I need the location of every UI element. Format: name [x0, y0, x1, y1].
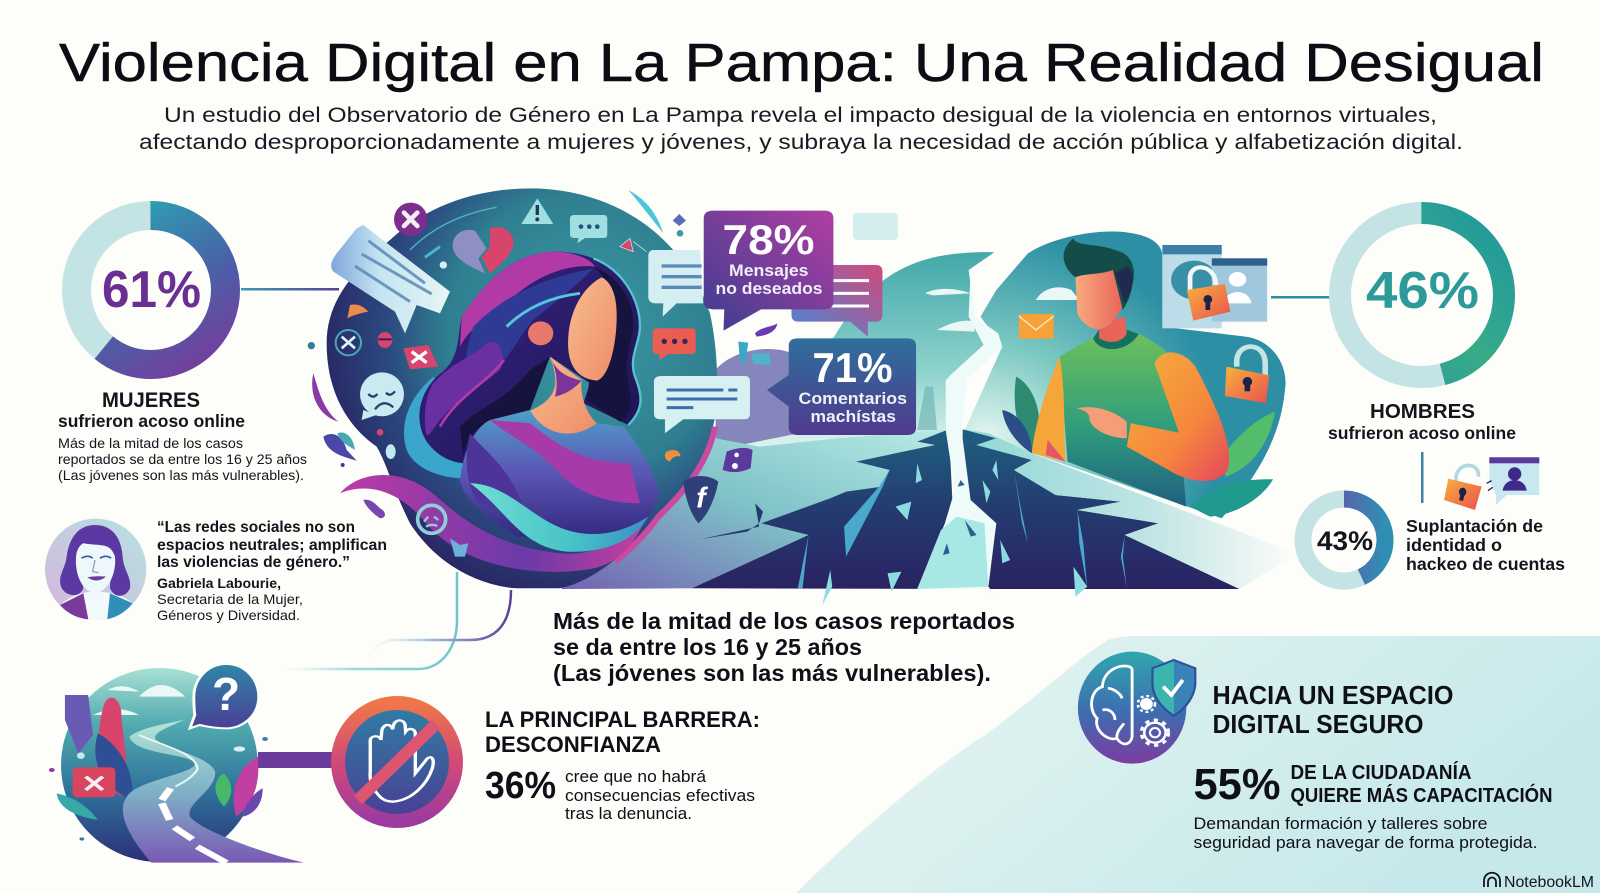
callout: 78% mensajes no deseados: Mensajes — [729, 261, 808, 280]
icon: envelope — [1019, 314, 1054, 339]
panel: hacia un espacio digital seguro background — [796, 636, 1600, 893]
connector line: mujeres — [241, 288, 339, 290]
text block: jovenes vulnerables: Más de la mitad de los casos reportados — [553, 608, 1015, 634]
text block: jovenes vulnerables — [553, 608, 1015, 686]
text block: la principal barrera: LA PRINCIPAL BARRERA: — [485, 707, 760, 732]
text block: la principal barrera: DESCONFIANZA — [485, 732, 661, 757]
callout: 71% comentarios machistas: 71% — [812, 344, 892, 391]
icon: winding road with question — [49, 668, 304, 863]
speech bubble: pink chat with lines — [792, 265, 882, 337]
text block: hombres: HOMBRES — [1370, 401, 1475, 423]
text block: hombres — [1328, 401, 1516, 443]
text block: suplantacion — [1406, 516, 1565, 574]
text block: mujeres: Más de la mitad de los casos — [58, 436, 243, 451]
callout: 78% mensajes no deseados — [704, 211, 833, 331]
icon: open padlock and profile — [1444, 457, 1539, 510]
text block: hacia un espacio digital seguro — [1194, 680, 1552, 852]
text block: mujeres: MUJERES — [102, 389, 200, 412]
text block: hacia un espacio digital seguro: DIGITAL SEGURO — [1212, 709, 1424, 739]
quote: Secretaria de la Mujer, — [157, 591, 303, 607]
text block: hacia un espacio digital seguro: 55% — [1194, 760, 1280, 809]
fractured ground and cliffs — [561, 270, 1297, 605]
donut chart: 46% hombres — [1340, 213, 1504, 377]
icon: profile card with padlock — [1162, 245, 1267, 328]
logo: NotebookLM: NotebookLM — [1504, 874, 1594, 891]
woman illustration in circle — [327, 188, 717, 588]
donut chart: 61% mujeres — [76, 216, 226, 364]
callout: 71% comentarios machistas: Comentarios — [798, 389, 907, 408]
icons around woman — [308, 190, 777, 557]
title: Violencia Digital en La Pampa: Una Realidad Desigual — [59, 33, 1544, 93]
quote: Géneros y Diversidad. — [157, 607, 300, 623]
donut chart: 46% hombres: 46% — [1366, 262, 1479, 320]
icon: brain shield and gears — [1078, 652, 1195, 764]
icon: question bubble — [190, 664, 259, 728]
subtitle: Un estudio del Observatorio de Género en La Pampa revela el impacto desigual de la violencia en entornos virtuales, — [164, 103, 1437, 127]
donut chart: 61% mujeres: 61% — [102, 261, 201, 319]
subtitle: afectando desproporcionadamente a mujeres y jóvenes, y subraya la necesidad de acción pública y alfabetización digital. — [139, 130, 1463, 154]
text block: mujeres: reportados se da entre los 16 y 25 años — [58, 452, 307, 467]
quote: espacios neutrales; amplifican — [157, 537, 387, 554]
icon: portrait of Gabriela Labourie — [45, 519, 146, 620]
text block: la principal barrera: consecuencias efectivas — [565, 787, 755, 805]
callout: 71% comentarios machistas: machístas — [810, 407, 896, 426]
text block: la principal barrera — [485, 707, 760, 823]
connector bar — [258, 752, 334, 768]
icons around woman: f — [696, 482, 708, 514]
donut chart: 43% suplantacion: 43% — [1317, 526, 1373, 556]
text block: la principal barrera: tras la denuncia. — [565, 805, 692, 823]
quote — [157, 519, 387, 623]
quote: Gabriela Labourie, — [157, 575, 281, 591]
callout: 78% mensajes no deseados: 78% — [722, 216, 814, 263]
divider line — [1421, 452, 1424, 503]
icon: no hand sign — [338, 703, 456, 821]
callout: 71% comentarios machistas — [767, 338, 916, 435]
connector lines: curved from woman to barrier — [282, 572, 511, 669]
connector line: hombres — [1271, 296, 1331, 298]
text block: suplantacion: hackeo de cuentas — [1406, 554, 1565, 574]
donut chart: 43% suplantacion — [1303, 499, 1385, 581]
quote: las violencias de género.” — [157, 554, 350, 571]
icon: padlock — [1225, 347, 1269, 403]
text block: la principal barrera: cree que no habrá — [565, 768, 707, 786]
text block: hombres: sufrieron acoso online — [1328, 423, 1516, 443]
text block: hacia un espacio digital seguro: QUIERE MÁS CAPACITACIÓN — [1290, 783, 1552, 807]
central illustration: fractured landscape with man — [716, 231, 1286, 518]
text block: hacia un espacio digital seguro: Demandan formación y talleres sobre — [1194, 814, 1488, 833]
text block: mujeres: sufrieron acoso online — [58, 411, 245, 431]
text block: mujeres: (Las jóvenes son las más vulnerables). — [58, 468, 304, 483]
callout: 78% mensajes no deseados: no deseados — [716, 279, 822, 298]
text block: hacia un espacio digital seguro: DE LA CIUDADANÍA — [1290, 761, 1472, 784]
man figure — [1002, 238, 1275, 517]
text block: hacia un espacio digital seguro: HACIA UN ESPACIO — [1212, 680, 1454, 710]
text block: jovenes vulnerables: (Las jóvenes son las más vulnerables). — [553, 660, 991, 686]
speech bubble: pale background chat — [853, 213, 898, 240]
text block: suplantacion: Suplantación de — [1406, 516, 1543, 536]
text block: jovenes vulnerables: se da entre los 16 y 25 años — [553, 634, 862, 660]
quote: “Las redes sociales no son — [157, 519, 355, 536]
text block: la principal barrera: 36% — [485, 765, 556, 807]
icon: question bubble: ? — [212, 668, 240, 720]
text block: hacia un espacio digital seguro: seguridad para navegar de forma protegida. — [1194, 833, 1538, 852]
text block: mujeres — [58, 389, 307, 483]
text block: suplantacion: identidad o — [1406, 535, 1502, 555]
subtitle — [139, 103, 1463, 154]
